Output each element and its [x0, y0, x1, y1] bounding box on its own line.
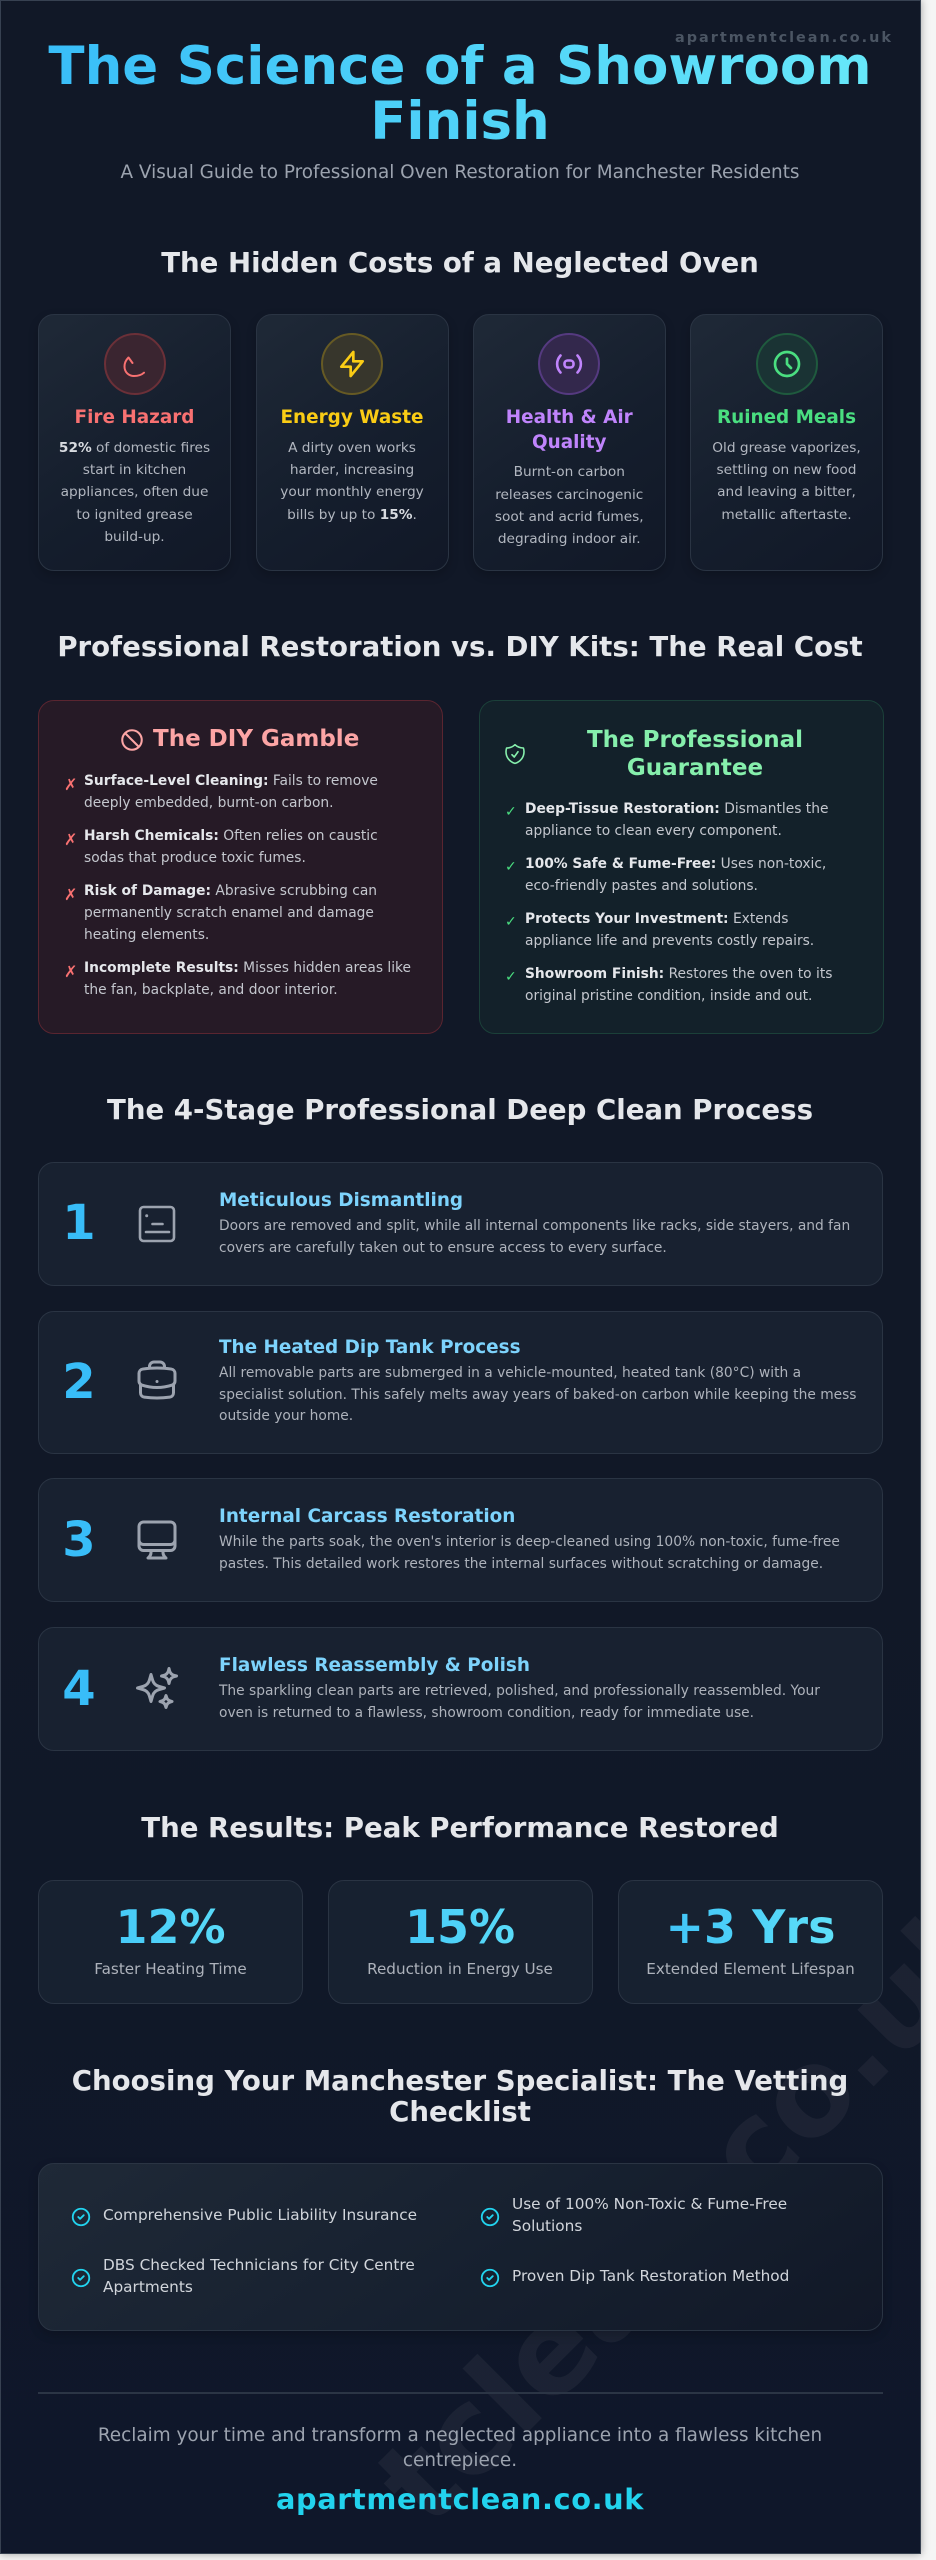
step text: [219, 1534, 840, 1572]
icon: sparkles: [136, 1667, 178, 1709]
panel: DIY gamble: ✗: [64, 962, 77, 981]
text: to ignited grease: [76, 507, 193, 523]
list item 4: Showroom Finish: Restores the oven to its: [525, 966, 832, 982]
check text 2: Solutions: [512, 2217, 582, 2235]
panel: professional guarantee: ✓: [505, 914, 517, 930]
title: Quality: [532, 432, 607, 453]
subtitle: A Visual Guide to Professional Oven Restoration for Manchester Residents: [120, 162, 800, 183]
list item 4: [64, 960, 411, 998]
check text 2: [512, 2195, 787, 2235]
list item 2: [505, 856, 826, 894]
check text 3: [103, 2256, 415, 2296]
icon: bolt: [321, 333, 383, 395]
text: start in kitchen: [83, 462, 186, 478]
list item 1: deeply embedded, burnt-on carbon.: [84, 795, 334, 811]
step text: covers are carefully taken out to ensure access to every surface.: [219, 1240, 667, 1256]
panel: DIY gamble: ✗: [64, 830, 77, 849]
icon: clock: [756, 333, 818, 395]
list item 2: [64, 828, 378, 866]
footer text: Reclaim your time and transform a neglected appliance into a flawless kitchen: [98, 2425, 822, 2446]
text: [280, 440, 424, 523]
list item 4: the fan, backplate, and door interior.: [84, 982, 338, 998]
check icon 4: [480, 2268, 500, 2288]
panel: DIY gamble: ✗: [64, 885, 77, 904]
step title: Internal Carcass Restoration: [219, 1506, 515, 1527]
icon: flame: [104, 333, 166, 395]
text: harder, increasing: [290, 462, 414, 478]
check icon 1: [72, 2208, 90, 2226]
check icon 3: [72, 2268, 90, 2288]
list item 3: appliance life and prevents costly repairs.: [525, 933, 814, 949]
list item 3: permanently scratch enamel and damage: [84, 905, 374, 921]
step 4: [38, 1627, 883, 1751]
panel: DIY gamble: [38, 700, 442, 1034]
title: Fire Hazard: [75, 407, 194, 428]
heading: hidden costs: The Hidden Costs of a Neglected Oven: [161, 246, 759, 279]
panel: DIY gamble: ✗: [64, 775, 77, 794]
text: [712, 440, 861, 523]
icon: briefcase: [138, 1360, 176, 1400]
stat: heating time: [38, 1880, 303, 2004]
step text: While the parts soak, the oven's interior is deep-cleaned using 100% non-toxic, fume-free: [219, 1534, 840, 1550]
icon: air emission: [538, 333, 600, 395]
panel heading: The Professional: [587, 727, 803, 753]
text: A dirty oven works: [288, 440, 416, 456]
text: your monthly energy: [280, 484, 424, 500]
list item 1: [505, 801, 828, 839]
stat label: Faster Heating Time: [94, 1960, 247, 1978]
check text 2: Use of 100% Non-Toxic & Fume-Free: [512, 2195, 787, 2213]
text: Old grease vaporizes,: [712, 440, 861, 456]
icon: monitor: [138, 1520, 176, 1560]
heading: checklist: [72, 2064, 848, 2128]
text: build-up.: [104, 529, 165, 545]
stat value: [39, 1899, 302, 1955]
list item 4: original pristine condition, inside and out.: [525, 988, 812, 1004]
text: degrading indoor air.: [498, 531, 641, 547]
step title: The Heated Dip Tank Process: [219, 1337, 521, 1358]
step text: The sparkling clean parts are retrieved, polished, and professionally reassembled. Your: [219, 1683, 820, 1699]
title: [38, 39, 882, 149]
step 2: [38, 1311, 883, 1454]
icon: panel: [138, 1206, 176, 1242]
list item 4: Incomplete Results: Misses hidden areas like: [84, 960, 411, 976]
stat label: Extended Element Lifespan: [646, 1960, 855, 1978]
heading: checklist: Checklist: [389, 2094, 531, 2128]
check icon 2: [480, 2208, 500, 2226]
step 1: [38, 1162, 883, 1286]
stat: lifespan: [618, 1880, 883, 2004]
step number: 3: [62, 1512, 96, 1568]
list item 1: appliance to clean every component.: [525, 823, 782, 839]
list item 3: Risk of Damage: Abrasive scrubbing can: [84, 883, 377, 899]
list item 1: [64, 773, 378, 811]
step number: 2: [62, 1354, 96, 1410]
title: Health & Air: [506, 407, 633, 428]
stat value: [328, 1899, 592, 1955]
panel: professional guarantee: ✓: [505, 969, 517, 985]
heading: comparison: Professional Restoration vs. DIY Kits: The Real Cost: [57, 630, 863, 663]
footer text: [98, 2425, 822, 2471]
check text 4: Proven Dip Tank Restoration Method: [512, 2267, 789, 2285]
step text: outside your home.: [219, 1408, 353, 1424]
step text: [218, 1683, 820, 1721]
list item 2: Harsh Chemicals: Often relies on caustic: [84, 828, 378, 844]
text: appliances, often due: [61, 484, 208, 500]
title: Finish: [370, 91, 550, 152]
card: fire hazard: [38, 314, 231, 571]
title: [506, 407, 633, 453]
list item 2: sodas that produce toxic fumes.: [84, 850, 306, 866]
step number: 4: [62, 1661, 96, 1717]
step text: oven is returned to a flawless, showroom condition, ready for immediate use.: [219, 1705, 754, 1721]
list item 3: Protects Your Investment: Extends: [525, 911, 788, 927]
text: soot and acrid fumes,: [495, 509, 644, 525]
card: health and air quality: [473, 314, 666, 571]
panel: professional guarantee: ✓: [505, 859, 517, 875]
heading: results: The Results: Peak Performance Restored: [141, 1811, 779, 1844]
step text: specialist solution. This safely melts away years of baked-on carbon while keeping the mess: [219, 1387, 856, 1403]
step text: [219, 1365, 856, 1424]
check text 3: DBS Checked Technicians for City Centre: [103, 2256, 415, 2274]
title: The Science of a Showroom: [48, 36, 872, 97]
stat value: 12%: [115, 1900, 226, 1954]
heading: checklist: Choosing Your Manchester Specialist: The Vetting: [72, 2064, 848, 2096]
list item 2: 100% Safe & Fume-Free: Uses non-toxic,: [525, 856, 826, 872]
stat label: Reduction in Energy Use: [367, 1960, 553, 1978]
list item 2: eco-friendly pastes and solutions.: [525, 878, 758, 894]
text: [495, 464, 644, 547]
check text 1: Comprehensive Public Liability Insurance: [103, 2206, 417, 2224]
step text: All removable parts are submerged in a vehicle-mounted, heated tank (80°C) with a: [219, 1365, 801, 1381]
list item 1: Surface-Level Cleaning: Fails to remove: [84, 773, 378, 789]
text: Burnt-on carbon: [514, 464, 625, 480]
text: metallic aftertaste.: [721, 507, 852, 523]
check text 3: Apartments: [103, 2278, 193, 2296]
stat value: 15%: [405, 1900, 515, 1954]
list item 3: [505, 911, 814, 949]
title: Energy Waste: [280, 407, 424, 428]
text: settling on new food: [717, 462, 856, 478]
icon: shield check: [505, 744, 525, 764]
footer url: apartmentclean.co.uk: [276, 2482, 644, 2516]
step number: 1: [62, 1195, 96, 1251]
stat value: +3 Yrs: [666, 1900, 835, 1954]
panel: professional guarantee: [479, 700, 884, 1034]
top-right site mark: apartmentclean.co.uk: [675, 30, 893, 46]
list item 1: Deep-Tissue Restoration: Dismantles the: [525, 801, 828, 817]
stat: energy use: [328, 1880, 592, 2004]
panel: professional guarantee: ✓: [505, 804, 517, 820]
step text: pastes. This detailed work restores the internal surfaces without scratching or damage.: [219, 1556, 823, 1572]
text: and leaving a bitter,: [717, 484, 856, 500]
panel heading: The DIY Gamble: [153, 726, 359, 752]
list item 4: [505, 966, 832, 1004]
title: Ruined Meals: [717, 407, 856, 428]
step text: [219, 1218, 850, 1256]
footer text: centrepiece.: [403, 2450, 517, 2471]
text: 52% of domestic fires: [59, 440, 210, 456]
text: [59, 440, 210, 545]
list item 3: [64, 883, 377, 943]
card: energy waste: [256, 314, 448, 571]
stat value: [619, 1899, 882, 1955]
panel heading: [587, 727, 803, 780]
panel: vetting checklist: [38, 2163, 883, 2331]
step title: Meticulous Dismantling: [219, 1190, 463, 1211]
step text: Doors are removed and split, while all internal components like racks, side stayers, and fan: [219, 1218, 850, 1234]
text: releases carcinogenic: [495, 487, 643, 503]
text: bills by up to 15%.: [287, 507, 417, 523]
panel heading: Guarantee: [627, 754, 763, 780]
list item 3: heating elements.: [84, 927, 209, 943]
step 3: [38, 1478, 883, 1602]
heading: process: The 4-Stage Professional Deep Clean Process: [107, 1093, 813, 1126]
icon: no symbol: [121, 729, 143, 751]
card: ruined meals: [690, 314, 883, 571]
step title: Flawless Reassembly & Polish: [219, 1655, 530, 1676]
